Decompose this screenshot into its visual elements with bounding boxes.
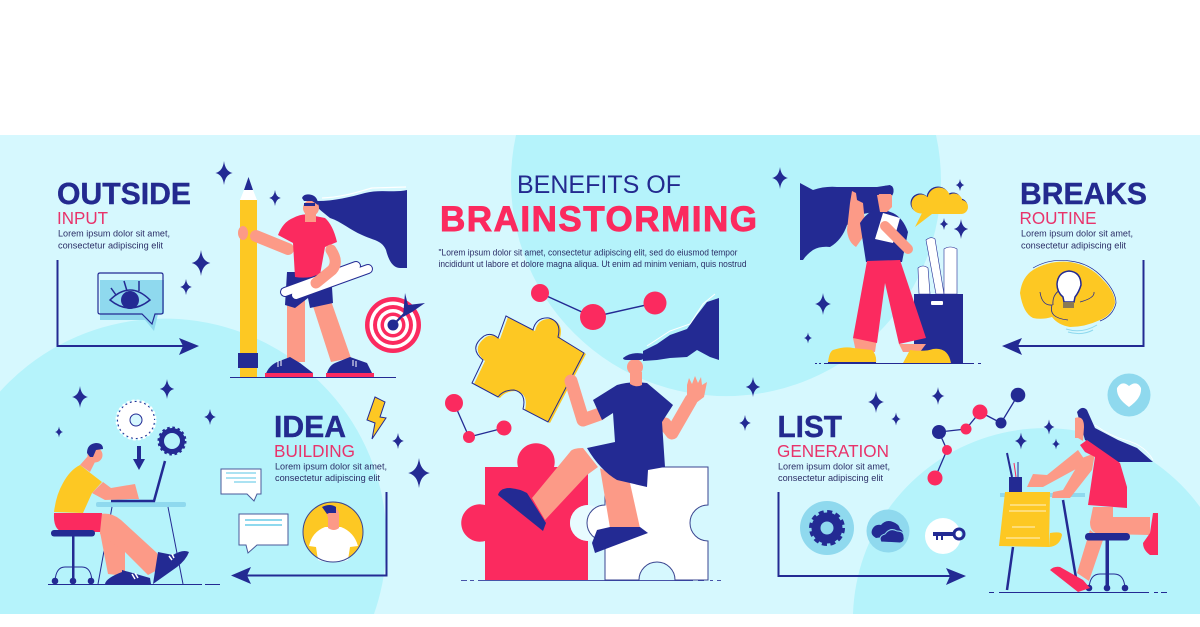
- heading: list generation: [777, 409, 890, 484]
- person with paper: [800, 183, 951, 364]
- ground line: [230, 376, 396, 378]
- stars: list generation: [868, 387, 1060, 450]
- title: [440, 172, 757, 239]
- chat bubble 1: [221, 469, 261, 501]
- heading: list generation: GENERATION: [777, 441, 889, 461]
- heading: breaks routine: consectetur adipiscing elit: [1021, 241, 1126, 252]
- puzzle piece: yellow: [472, 316, 586, 423]
- heading: outside input: Lorem ipsum dolor sit amet,: [58, 229, 170, 240]
- icon: target: [365, 293, 425, 353]
- stars: breaks routine: [772, 167, 968, 344]
- heading: idea building: IDEA: [274, 409, 346, 444]
- icon: key circle: [925, 518, 964, 554]
- stars: idea building: [55, 379, 430, 488]
- arrow: outside input: [58, 260, 199, 355]
- icon: lightning bolt: [367, 397, 386, 439]
- person with pencil: [238, 187, 407, 377]
- heading: outside input: INPUT: [57, 208, 108, 228]
- heading: list generation: LIST: [778, 409, 842, 444]
- heading: idea building: [274, 409, 387, 484]
- heading: outside input: [57, 176, 191, 252]
- icon: brain with bulb: [1020, 260, 1116, 334]
- chat bubble 2: [239, 514, 288, 553]
- ground line: [461, 580, 726, 582]
- arrow: list generation: [778, 492, 966, 585]
- intro text: [438, 248, 747, 269]
- heading: breaks routine: ROUTINE: [1020, 208, 1096, 228]
- person at desk: [989, 408, 1167, 592]
- icon: white gear: [117, 401, 155, 439]
- heading: breaks routine: BREAKS: [1020, 176, 1147, 211]
- stars: outside input: [180, 161, 281, 295]
- heading: list generation: consectetur adipiscing elit: [778, 473, 883, 484]
- heading: idea building: Lorem ipsum dolor sit amet,: [275, 462, 387, 472]
- heading: idea building: BUILDING: [274, 441, 355, 461]
- arrow: breaks routine: [1002, 260, 1144, 355]
- intro text: "Lorem ipsum dolor sit amet, consectetur adipiscing elit, sed do eiusmod tempor: [438, 248, 738, 258]
- heading: idea building: consectetur adipiscing elit: [275, 473, 380, 484]
- pencil: [238, 177, 258, 377]
- intro text: incididunt ut labore et dolore magna aliqua. Ut enim ad minim veniam, quis nostrud: [438, 259, 747, 269]
- arrow: idea building: [231, 492, 386, 584]
- network: top: [531, 284, 666, 330]
- ground line: [815, 362, 981, 364]
- heading: list generation: Lorem ipsum dolor sit amet,: [778, 462, 890, 472]
- stars: center: [739, 377, 760, 431]
- icon: cloud circle: [866, 510, 910, 552]
- puzzle piece: white: [587, 467, 708, 580]
- icon: heart circle: [1108, 374, 1150, 416]
- puzzle piece: red: [461, 443, 606, 580]
- heading: outside input: consectetur adipiscing elit: [58, 241, 163, 252]
- network: list generation: [928, 388, 1025, 486]
- heading: breaks routine: Lorem ipsum dolor sit amet,: [1021, 229, 1133, 240]
- title: BENEFITS OF: [517, 172, 681, 199]
- person at laptop: [48, 443, 220, 584]
- arrow: down: [133, 446, 145, 470]
- network: left: [445, 394, 512, 443]
- icon: eye card: [98, 273, 164, 331]
- box with scrolls: [914, 238, 963, 363]
- person on puzzle: [498, 294, 719, 553]
- speech cloud: [910, 186, 968, 227]
- icon: gear circle: [800, 501, 854, 555]
- icon: navy gear: [159, 428, 185, 454]
- title: BRAINSTORMING: [440, 200, 757, 239]
- background panel: [0, 135, 1200, 614]
- heading: breaks routine: [1020, 176, 1147, 252]
- avatar: [303, 502, 363, 562]
- heading: outside input: OUTSIDE: [57, 176, 191, 211]
